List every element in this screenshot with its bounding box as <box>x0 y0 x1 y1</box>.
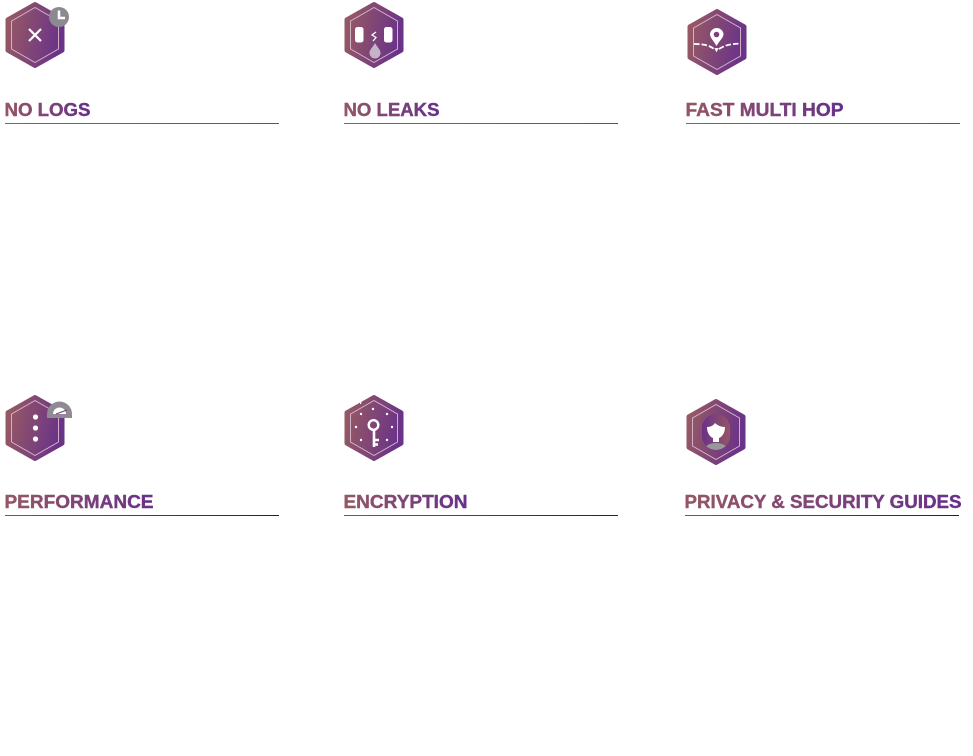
heading: performance: PERFORMANCE <box>4 492 154 512</box>
icon: no leaks <box>346 4 402 66</box>
heading: encryption: ENCRYPTION <box>344 492 468 512</box>
heading: no leaks: NO LEAKS <box>344 100 440 120</box>
heading: no logs: NO LOGS <box>4 100 90 120</box>
icon: privacy and security guides <box>688 401 744 463</box>
icon: performance <box>8 397 72 459</box>
heading: privacy and security guides: PRIVACY & SECURITY GUIDES <box>684 492 962 512</box>
icon: no logs <box>8 4 69 66</box>
heading: fast multi hop: FAST MULTI HOP <box>686 100 844 120</box>
icon: fast multi hop <box>690 11 744 73</box>
icon: encryption <box>346 397 402 459</box>
